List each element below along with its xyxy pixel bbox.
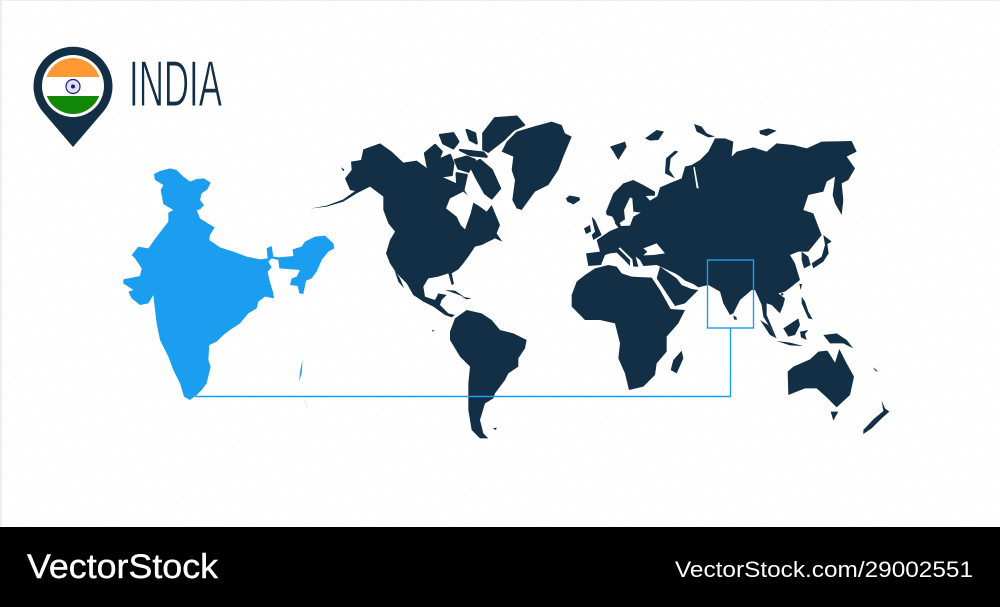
watermark logo text: VectorStock bbox=[27, 548, 219, 586]
title: INDIA bbox=[129, 47, 222, 120]
north america bbox=[310, 143, 502, 332]
location pin with flag bbox=[34, 47, 113, 147]
seas and inlets bbox=[643, 167, 825, 255]
arabia bbox=[657, 267, 698, 306]
british isles bbox=[584, 217, 602, 240]
madagascar bbox=[671, 351, 683, 373]
flag bbox=[45, 58, 101, 114]
world map bbox=[310, 117, 889, 438]
connector line and locator box bbox=[195, 260, 754, 396]
japan bbox=[812, 235, 832, 268]
canadian arctic islands bbox=[425, 117, 524, 198]
watermark bar bbox=[0, 527, 1000, 607]
lakshadweep bbox=[299, 359, 309, 409]
iceland east view bbox=[566, 196, 580, 204]
new zealand bbox=[863, 401, 889, 434]
greenland bbox=[502, 122, 572, 210]
arctic russian islands bbox=[610, 124, 777, 178]
korea bbox=[802, 252, 811, 268]
australia bbox=[788, 349, 854, 421]
iceland bbox=[566, 196, 580, 204]
europe bbox=[586, 180, 708, 267]
south america bbox=[450, 310, 527, 438]
africa bbox=[572, 265, 685, 390]
sri lanka bbox=[733, 315, 737, 320]
asia bbox=[643, 138, 857, 338]
hudson bay bbox=[446, 192, 474, 229]
watermark url: VectorStock.com/29002551 bbox=[675, 557, 973, 582]
india enlarged map bbox=[123, 168, 334, 409]
southeast asia islands bbox=[760, 284, 878, 372]
